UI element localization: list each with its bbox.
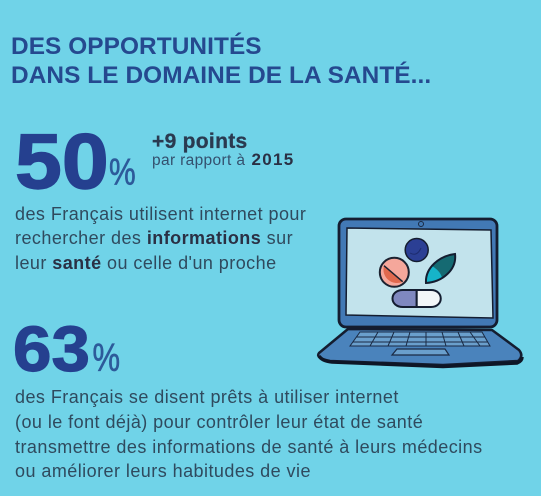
text: 50% description: rechercher des informations sur [15, 228, 293, 248]
stat: 50%: % [109, 152, 136, 193]
text: 63% description: (ou le font déjà) pour contrôler leur état de santé [15, 412, 423, 432]
pill: capsule [392, 290, 441, 307]
stat: 63%: 63 [13, 313, 90, 385]
text: 50% description: des Français utilisent internet pour [15, 204, 306, 224]
laptop base [318, 329, 522, 366]
title: DES OPPORTUNITÉS [11, 33, 262, 60]
text: 63% description [15, 387, 483, 481]
stat note: +9 points: par rapport à 2015 [152, 150, 294, 169]
text: 50% description [15, 204, 306, 273]
text: 63% description: transmettre des informations de santé à leurs médecins [15, 437, 483, 457]
keyboard [350, 332, 490, 346]
text: 63% description: des Français se disent prêts à utiliser internet [15, 387, 399, 407]
laptop lid [339, 219, 497, 327]
title [11, 32, 431, 89]
stat: 63%: % [92, 336, 120, 379]
text: 50% description: leur santé ou celle d'un proche [15, 252, 277, 272]
screen [346, 228, 493, 318]
title: DANS LE DOMAINE DE LA SANTÉ... [11, 62, 431, 89]
stat note: +9 points [152, 130, 294, 169]
trackpad [392, 349, 449, 355]
pill: coral round [380, 258, 409, 287]
icon: laptop with pills [316, 218, 524, 368]
stat note: +9 points: +9 points [152, 130, 247, 153]
pill: navy round [405, 238, 428, 262]
webcam [418, 222, 424, 226]
text: 63% description: ou améliorer leurs habitudes de vie [15, 461, 311, 481]
stat: 50%: 50 [14, 116, 108, 204]
pill: teal leaf [426, 254, 455, 283]
